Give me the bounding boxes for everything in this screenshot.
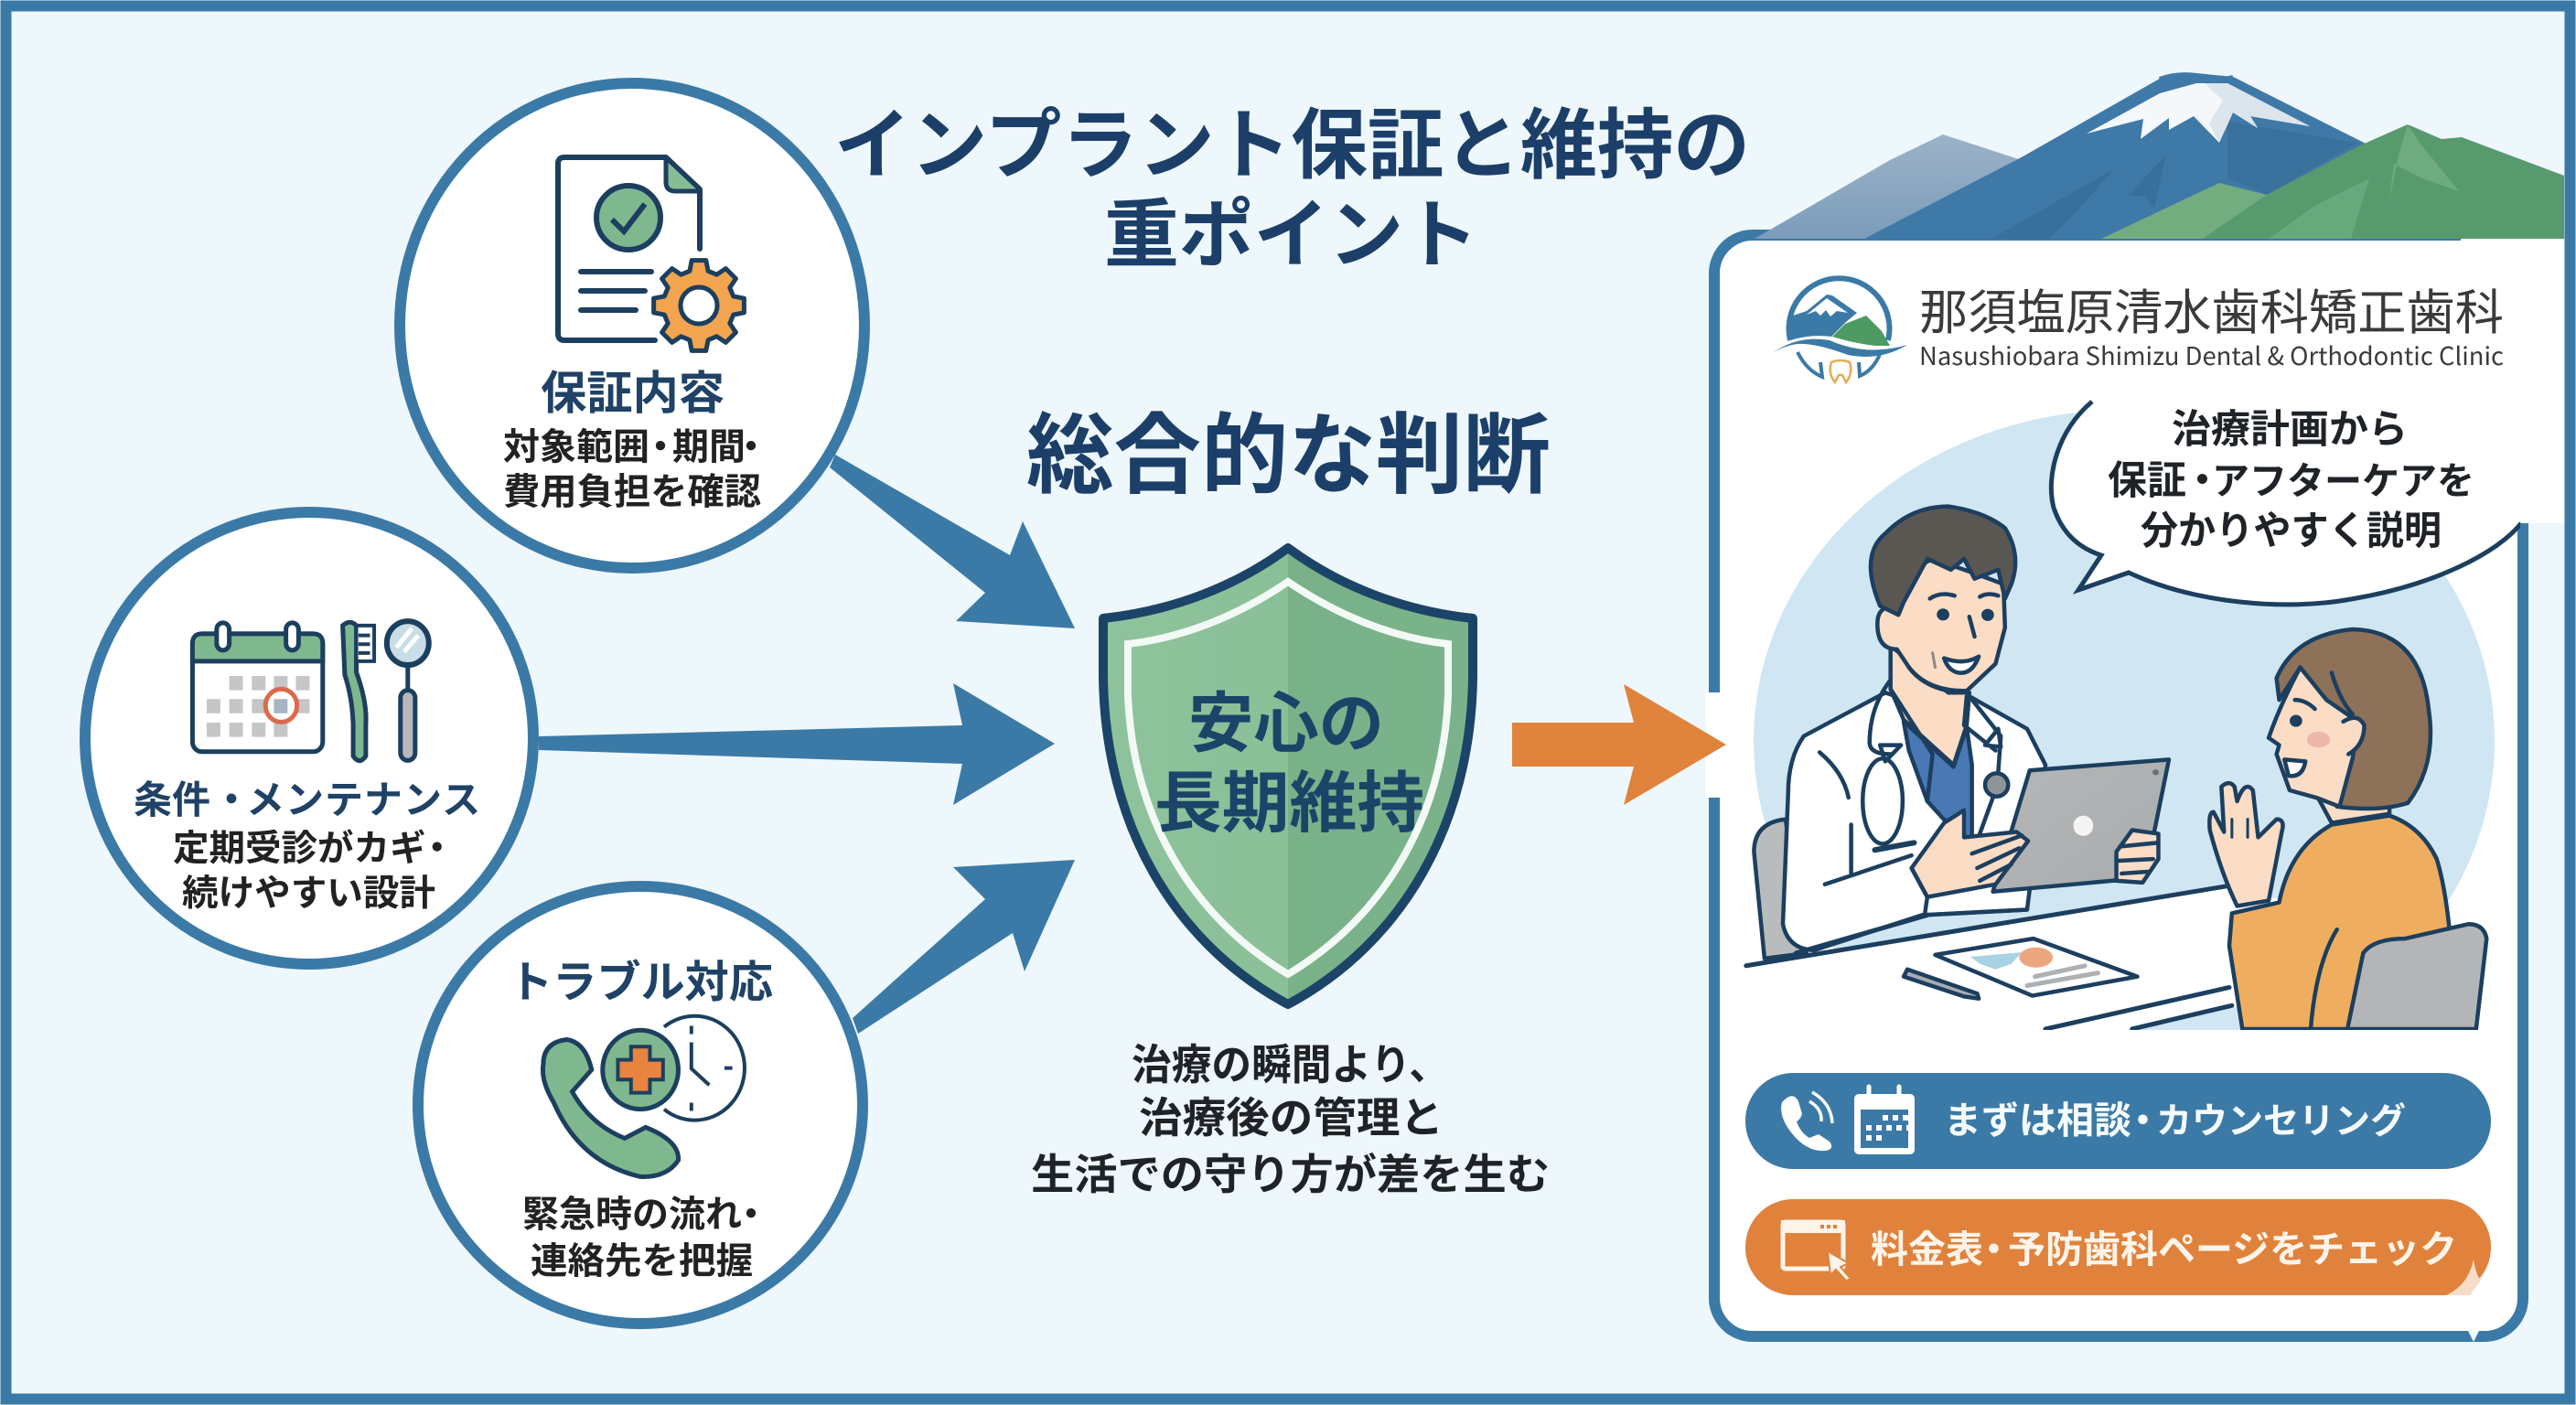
panel: warranty details circle (400, 83, 864, 568)
button: consultation (1745, 1073, 2491, 1169)
table edge (1746, 886, 2227, 966)
table surface (1840, 888, 2278, 1030)
illustration: consultation scene (1720, 410, 2495, 1072)
paper and pen (1904, 938, 2138, 999)
panel: clinic card (1705, 74, 2564, 1342)
speech bubble: 分かりやすく説明 (2141, 509, 2442, 553)
text: maintenance description: ・ (419, 829, 456, 869)
clinic name: 那須塩原清水歯科矯正歯科 (1919, 286, 2504, 340)
text: shield caption: 治療後の管理と (1139, 1094, 1444, 1142)
icon: calendar, toothbrush and mirror (192, 621, 429, 761)
text: shield caption (1031, 1041, 1550, 1198)
heading: conditions and maintenance: メンテナンス (246, 778, 481, 821)
text: warranty description: 費用負担を確認 (503, 472, 761, 512)
speech bubble: ・ (2183, 459, 2222, 503)
illustration: mountains (1755, 74, 2564, 239)
arrow: maintenance to shield (539, 683, 1055, 805)
speech bubble: 治療計画から (2172, 408, 2408, 452)
button: consultation: まずは相談 (1944, 1099, 2131, 1142)
clinic name (1919, 286, 2504, 372)
text: trouble description: ・ (733, 1195, 769, 1235)
tablet (1993, 759, 2169, 892)
button: consultation: カウンセリング (2156, 1102, 2406, 1142)
doctor (1754, 507, 2169, 959)
button: fee table and prevention page (1745, 1199, 2491, 1295)
text: warranty description: ・ (733, 427, 769, 467)
icon: document with gear (558, 157, 744, 350)
title: インプラント保証と維持の (834, 102, 1750, 188)
arrow: warranty to shield (830, 455, 1075, 628)
icon: browser window and cursor (1781, 1220, 1851, 1281)
speech bubble: 保証 (2108, 459, 2186, 503)
heading: warranty details: 保証内容 (541, 368, 724, 419)
arrow: shield to clinic (1512, 684, 1726, 805)
button: fee table and prevention page: 料金表 (1871, 1228, 1983, 1271)
text: maintenance description (173, 829, 456, 914)
icon: phone (1781, 1092, 1832, 1151)
text: warranty description: ・ (642, 427, 679, 467)
heading: overall judgment: 総合的な判断 (1026, 407, 1551, 505)
panel: conditions and maintenance circle (85, 512, 533, 964)
text: trouble description (522, 1195, 769, 1282)
text: warranty description: 期間 (672, 427, 746, 467)
speech bubble (2051, 393, 2527, 605)
arrow: trouble to shield (853, 860, 1075, 1034)
text: warranty description (503, 427, 769, 512)
heading: conditions and maintenance: ・ (212, 778, 251, 821)
shield: long-term peace of mind (1103, 548, 1473, 1004)
text: maintenance description: 定期受診がカギ (173, 829, 426, 869)
heading: trouble response: トラブル対応 (509, 959, 773, 1007)
title (834, 102, 1750, 277)
text: warranty description: 対象範囲 (503, 427, 649, 467)
clinic name: Nasushiobara Shimizu Dental & Orthodontic Clinic (1919, 337, 2504, 372)
shield: long-term peace of mind: 長期維持 (1154, 767, 1424, 841)
button: fee table and prevention page: ・ (1975, 1228, 2012, 1271)
text: shield caption: 生活での守り方が差を生む (1031, 1151, 1550, 1198)
heading: conditions and maintenance (134, 778, 481, 821)
text: shield caption: 治療の瞬間より、 (1132, 1041, 1449, 1089)
title: 重ポイント (1104, 194, 1478, 277)
button: consultation: ・ (2124, 1099, 2162, 1142)
shield: long-term peace of mind: 安心の (1188, 688, 1384, 761)
icon: calendar (1854, 1087, 1915, 1154)
text: trouble description: 連絡先を把握 (531, 1241, 753, 1282)
patient (2045, 629, 2486, 1029)
icon: phone, medical cross and clock (542, 1016, 745, 1176)
logo: clinic mark (1773, 278, 1907, 382)
text: trouble description: 緊急時の流れ (522, 1195, 742, 1235)
panel: trouble response circle (418, 886, 863, 1324)
sparkle artefact (2446, 1260, 2482, 1295)
button: fee table and prevention page: 予防歯科ページをチェック (2008, 1228, 2457, 1271)
speech bubble: アフターケアを (2212, 460, 2474, 502)
text: maintenance description: 続けやすい設計 (182, 874, 435, 914)
heading: conditions and maintenance: 条件 (134, 778, 210, 821)
